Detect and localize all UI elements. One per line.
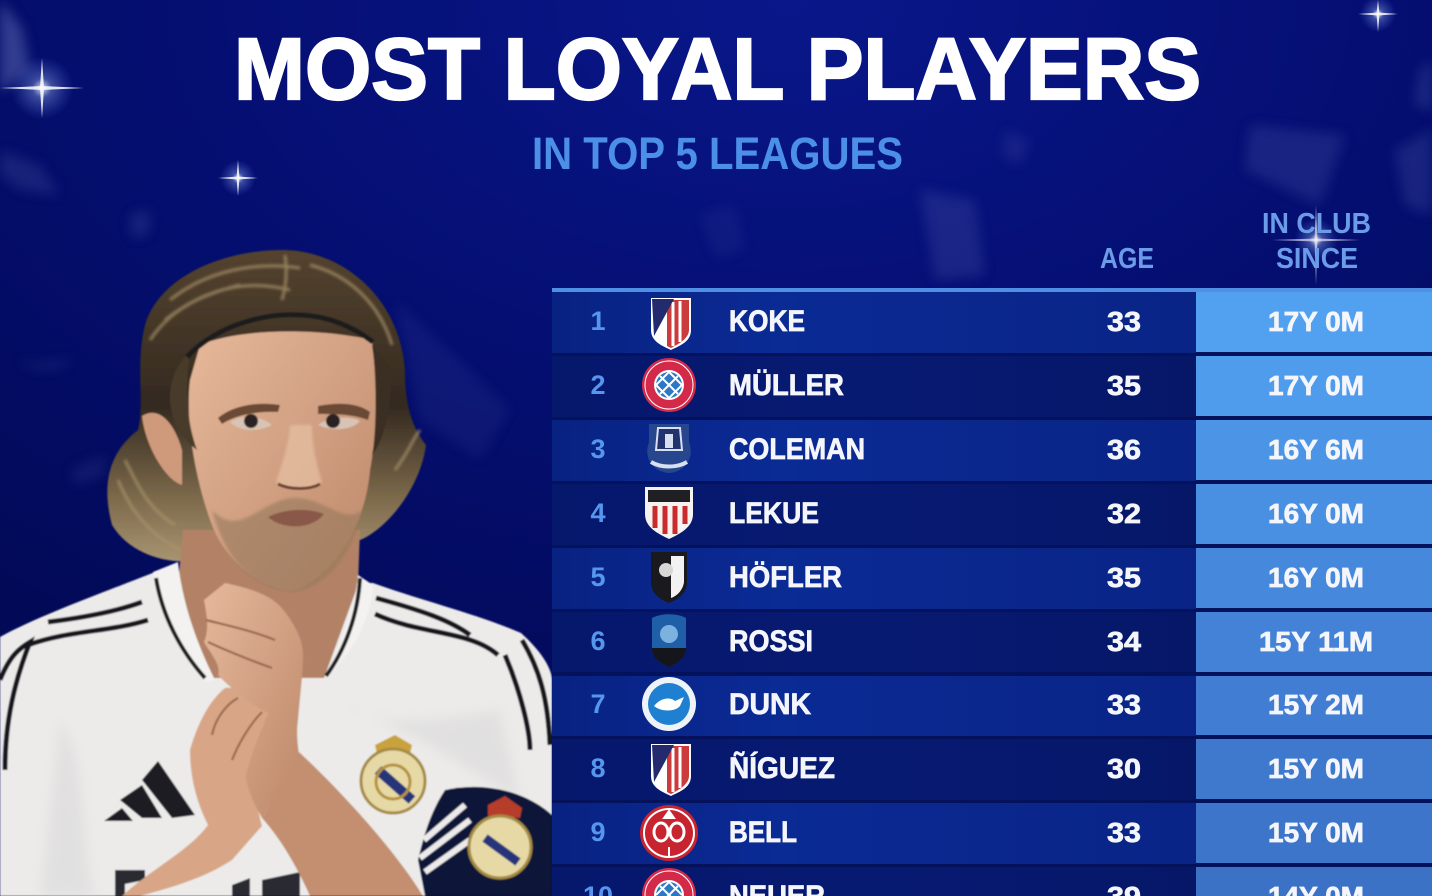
shoulder stripes	[0, 598, 550, 770]
jersey body	[0, 572, 552, 896]
row 3: COLEMAN	[729, 433, 865, 466]
row 2: 2	[590, 370, 606, 400]
row 2: 35	[1107, 370, 1141, 401]
row 1	[552, 292, 1432, 353]
row 8	[552, 739, 1432, 800]
logo: Everton	[647, 424, 691, 473]
row 6	[552, 612, 1432, 672]
side hair locks	[170, 352, 197, 450]
logo: Atletico	[651, 298, 691, 350]
row 3: 3	[590, 434, 606, 464]
row 7: 15Y 2M	[1268, 689, 1364, 720]
logo: Atalanta	[652, 614, 686, 667]
collar	[153, 562, 215, 682]
logo: Mainz	[640, 805, 698, 861]
eyes and brows	[218, 404, 370, 424]
row 2: 17Y 0M	[1268, 370, 1364, 401]
row 9	[552, 803, 1432, 864]
column header: in club since: IN CLUB	[1262, 208, 1371, 240]
row 3: 36	[1107, 434, 1141, 465]
row 2: MÜLLER	[729, 369, 844, 402]
row 5: 5	[590, 562, 606, 592]
headband	[187, 315, 373, 357]
captain armband	[418, 787, 552, 896]
nose	[276, 425, 322, 490]
finger lines	[206, 620, 275, 760]
row 10	[552, 867, 1432, 896]
row 1: 17Y 0M	[1268, 306, 1364, 337]
upper hand	[204, 583, 303, 818]
row 4: LEKUE	[729, 497, 819, 530]
row 4: 4	[590, 498, 606, 528]
row 4: 16Y 0M	[1268, 498, 1364, 529]
row 9: BELL	[729, 816, 797, 849]
title: MOST LOYAL PLAYERS	[234, 21, 1201, 118]
player illustration	[0, 250, 552, 896]
face	[189, 332, 376, 590]
right forearm	[262, 752, 423, 896]
row 7: 33	[1107, 689, 1141, 720]
row 6: 6	[590, 626, 606, 656]
row 3	[552, 420, 1432, 481]
row 6: 34	[1107, 626, 1141, 657]
row 8: 30	[1107, 753, 1141, 784]
row 7	[552, 676, 1432, 736]
table	[552, 288, 1432, 896]
row 5: HÖFLER	[729, 561, 842, 594]
left hand and forearm	[122, 688, 268, 896]
row 8: ÑÍGUEZ	[729, 751, 835, 785]
table top line	[552, 288, 1432, 292]
row 7: 7	[590, 689, 606, 719]
logo: Atletico	[651, 744, 691, 796]
crest: jersey	[361, 735, 425, 813]
ear	[142, 413, 182, 485]
row 4: 32	[1107, 498, 1141, 529]
column header: in club since: SINCE	[1276, 243, 1358, 275]
adidas stripes	[104, 761, 195, 821]
row 1: 33	[1107, 306, 1141, 337]
hair back	[107, 250, 426, 561]
logo: Freiburg	[651, 552, 687, 603]
row 1: KOKE	[729, 305, 805, 338]
logo: Bayern	[642, 358, 696, 412]
jersey folds	[40, 700, 520, 896]
row 1: 1	[590, 306, 606, 336]
row 5: 16Y 0M	[1268, 562, 1364, 593]
subtitle: IN TOP 5 LEAGUES	[532, 128, 903, 179]
column header: in club since	[1262, 208, 1371, 275]
decorative confetti shapes	[0, 0, 1432, 485]
row 8: 15Y 0M	[1268, 753, 1364, 784]
row 9: 15Y 0M	[1268, 817, 1364, 848]
logo: Athletic	[645, 487, 693, 539]
logo: Brighton	[642, 677, 696, 731]
beard and mouth	[212, 498, 362, 592]
logo: Bayern	[642, 868, 696, 896]
row 8: 8	[590, 753, 606, 783]
neck	[178, 530, 360, 678]
row 9: 33	[1107, 817, 1141, 848]
row 9: 9	[590, 817, 606, 847]
sparkle stars	[0, 0, 1398, 285]
row 6: 15Y 11M	[1259, 626, 1373, 657]
row 2	[552, 356, 1432, 417]
row 6: ROSSI	[729, 625, 813, 658]
row 5: 35	[1107, 562, 1141, 593]
row 4	[552, 484, 1432, 545]
row 3: 16Y 6M	[1268, 434, 1364, 465]
sponsor text hint	[115, 870, 300, 896]
row 5	[552, 548, 1432, 609]
row 7: DUNK	[729, 688, 811, 721]
column header: age: AGE	[1100, 243, 1154, 275]
